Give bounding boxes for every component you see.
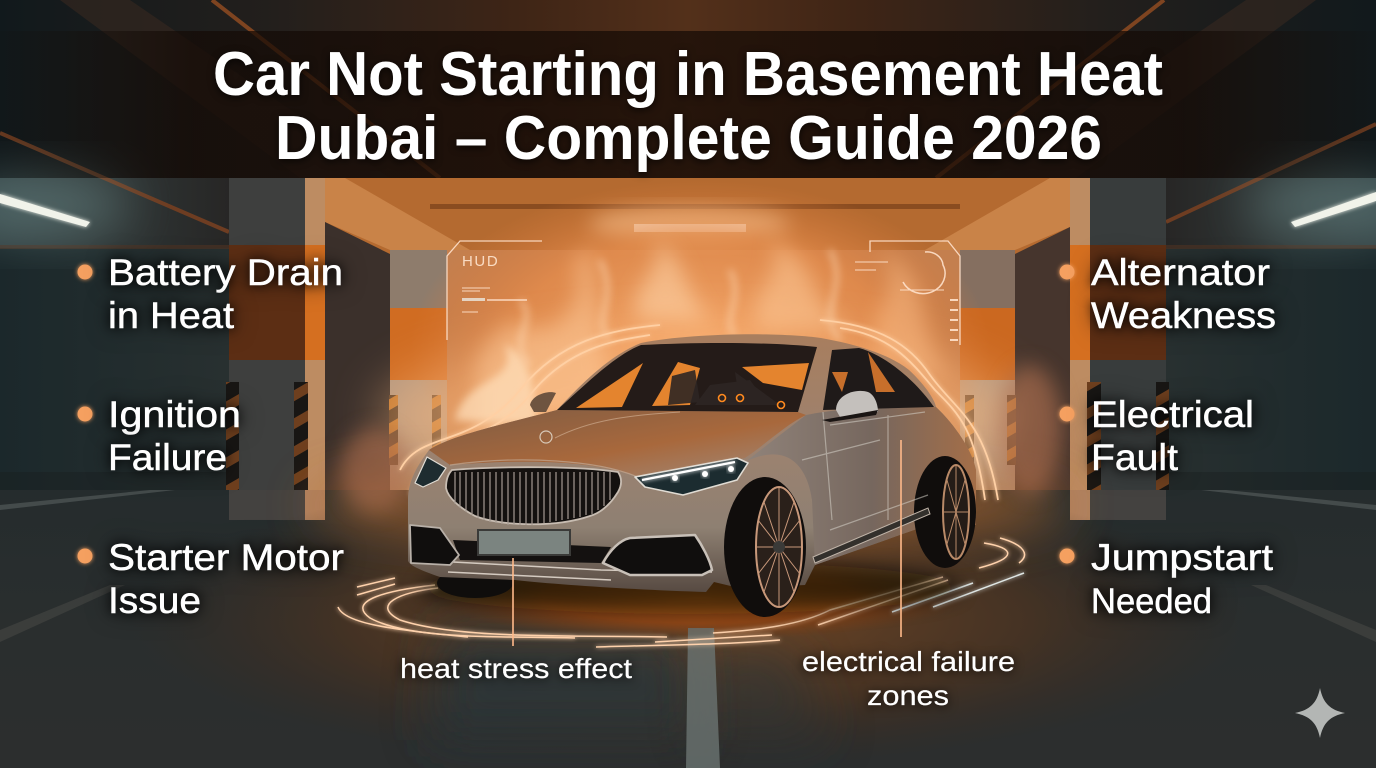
right list: electrical fault: Fault	[1091, 437, 1179, 478]
right list: jumpstart	[1060, 537, 1274, 621]
right side mirror	[836, 391, 878, 417]
ceiling light	[590, 210, 790, 242]
right list: electrical fault	[1060, 394, 1254, 478]
right list: electrical fault: Electrical	[1091, 394, 1254, 435]
left headlight	[415, 457, 446, 487]
left list: ignition failure: Failure	[108, 437, 227, 478]
right air intake	[603, 535, 712, 575]
right headlight	[635, 458, 748, 495]
license plate	[478, 530, 570, 555]
lower bumper	[410, 562, 712, 580]
left list: battery drain	[78, 252, 343, 336]
left list: starter motor	[78, 537, 344, 621]
title: Dubai – Complete Guide 2026	[275, 104, 1102, 173]
caption: electrical failure zones: electrical failure	[802, 646, 1015, 677]
left list: ignition failure: Ignition	[108, 394, 241, 435]
left air intake	[410, 525, 459, 565]
front pillars	[229, 178, 305, 520]
left list: starter motor: Starter Motor	[108, 537, 344, 578]
heat flow lines around car	[400, 320, 998, 500]
dash warning lights	[718, 394, 784, 408]
left list: battery drain: in Heat	[108, 295, 235, 336]
right list: alternator	[1060, 252, 1276, 336]
front wheel	[724, 477, 806, 617]
rear wheel	[914, 456, 976, 568]
caption: electrical failure zones	[802, 646, 1015, 711]
callout leader: heat stress	[512, 558, 514, 646]
left list: ignition failure	[78, 394, 241, 478]
right list: jumpstart: Jumpstart	[1091, 537, 1274, 578]
HUD label: HUD	[462, 253, 499, 270]
car body	[408, 334, 976, 592]
title	[213, 40, 1163, 173]
right list: jumpstart: Needed	[1091, 582, 1212, 621]
grille	[446, 467, 621, 525]
windshield	[557, 343, 817, 412]
car	[408, 334, 976, 617]
title: Car Not Starting in Basement Heat	[213, 40, 1163, 109]
caption: electrical failure zones: zones	[867, 680, 949, 711]
door lines and highlights	[802, 412, 928, 530]
hood star	[540, 431, 552, 443]
lower grille	[453, 540, 611, 563]
front left tyre	[437, 568, 513, 598]
floor	[0, 490, 1376, 768]
side windows	[823, 348, 934, 410]
HUD panel frame with readouts	[447, 241, 960, 345]
left list: starter motor: Issue	[108, 580, 201, 621]
left mirror	[530, 392, 556, 412]
right list: alternator: Alternator	[1091, 252, 1270, 293]
title band	[0, 31, 1376, 178]
right list: alternator: Weakness	[1091, 295, 1276, 336]
center ceiling	[325, 178, 1070, 258]
flames and heat smoke	[340, 180, 1062, 512]
caption: heat stress effect: heat stress effect	[400, 653, 632, 684]
floor heat rings	[338, 538, 1025, 647]
left list: battery drain: Battery Drain	[108, 252, 343, 293]
icon: sparkle watermark	[1295, 688, 1345, 738]
callout leader: electrical failure	[900, 440, 902, 637]
